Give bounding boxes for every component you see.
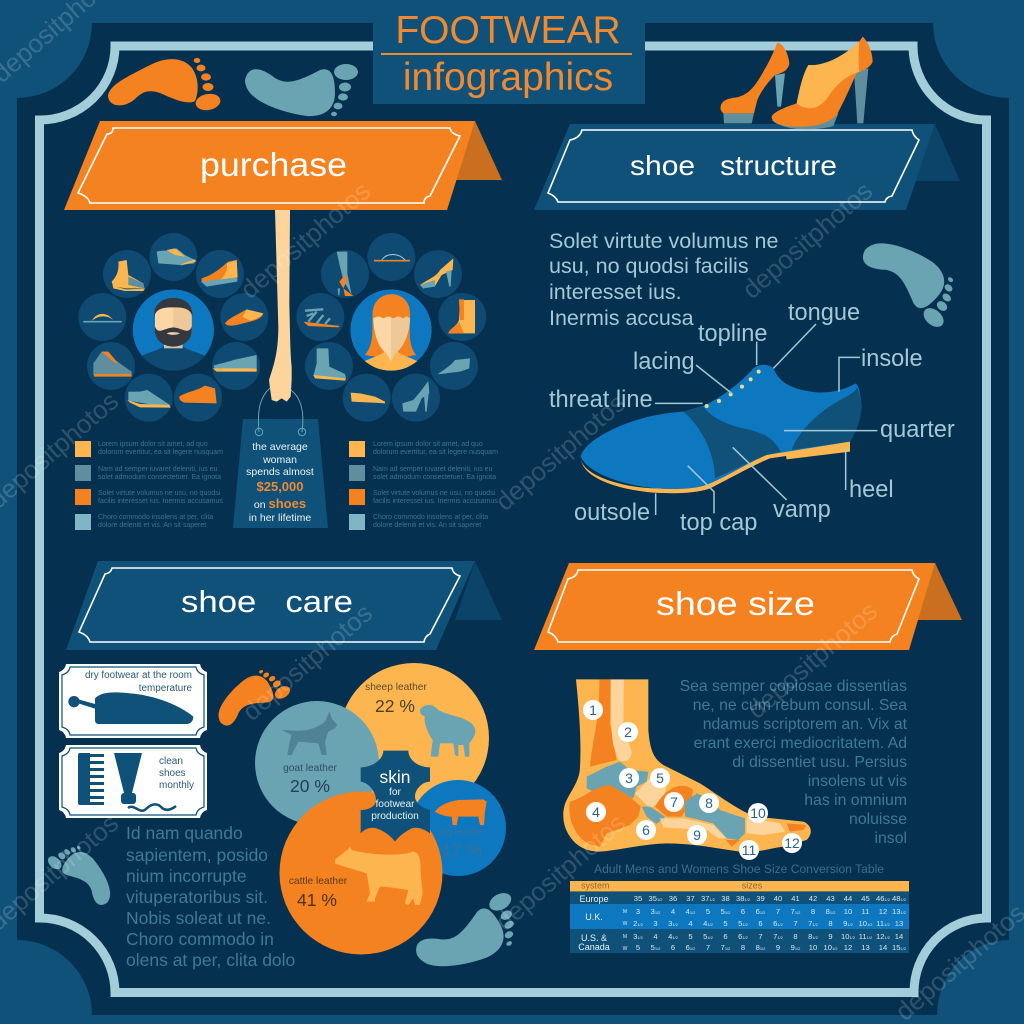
icon: shoe tree (68, 692, 193, 724)
shoe labels: outsole (574, 500, 650, 526)
banner: shoe size: shoe size (656, 585, 815, 622)
row: US women: 101/2 (823, 943, 838, 952)
number markers: 10 (750, 805, 766, 821)
row: Europe: 351/2 (648, 894, 663, 903)
legend: left: Nam ad semper iuvaret deleniti, ius eu (98, 466, 218, 473)
row: Europe: 40 (774, 894, 782, 903)
legend: right: Nam ad semper iuvaret deleniti, ius eu (373, 466, 493, 473)
row: US women: 91/2 (791, 943, 801, 952)
row: Europe: 35 (634, 894, 642, 903)
legend: right: Lorem ipsum dolor sit amet, ad quo (373, 441, 483, 448)
number markers (583, 700, 802, 860)
icon: teal footprint top (245, 64, 358, 116)
row: UK men: 5 (706, 907, 710, 916)
row: Europe: 39 (756, 894, 765, 903)
shoe labels: topline (698, 321, 768, 347)
shoe diagram (581, 324, 877, 515)
shopping bag callout: $25,000 (256, 479, 304, 494)
leather chart: 22 % (375, 696, 415, 716)
icon: orange footprint care (208, 662, 292, 731)
text block: shoe care: Id nam quando (126, 823, 243, 843)
shoe labels: top cap (680, 510, 757, 536)
row: US women: 5 (636, 943, 640, 952)
row: US men: 9 (828, 932, 833, 941)
size conversion table: system (581, 880, 610, 890)
icon: pig (435, 799, 487, 825)
icon: oxford (127, 390, 171, 408)
lacing dots (705, 370, 761, 408)
row: US men: 31/2 (633, 932, 644, 941)
row: US men: 7 (758, 932, 763, 941)
row: UK women: 21/2 (633, 919, 644, 928)
row: UK men: 12 (879, 907, 887, 916)
banner: shoe size (534, 563, 962, 650)
legend: right: dolorum evertitur, ea sit legere nusquam (373, 449, 498, 456)
text block: shoe size: insol (874, 830, 907, 847)
number markers: 8 (705, 795, 713, 811)
shoe labels: vamp (773, 497, 831, 523)
shoe labels: tongue (788, 300, 860, 326)
row: US men: 71/2 (773, 932, 784, 941)
shoe labels: threat line (549, 387, 653, 413)
row: US women: 151/2 (892, 943, 907, 952)
watermarks: depositphotos (234, 176, 376, 305)
shoe upper (581, 365, 862, 489)
number markers: 7 (670, 794, 678, 810)
icon: teal boot women (313, 348, 346, 381)
text block: shoe size: ne, ne cum rebum consul. Sea (693, 697, 907, 714)
text block: shoe size: has in omnium (804, 792, 907, 809)
row: UK women: 6 (758, 919, 763, 928)
text block: shoe structure: interesset ius. (549, 280, 682, 304)
cattle segment (280, 792, 442, 954)
row: UK men: 11 (862, 907, 869, 916)
legend: left: Lorem ipsum dolor sit amet, ad quo (98, 441, 208, 448)
row: UK men: 8 (811, 907, 815, 916)
icon: man avatar (133, 289, 214, 373)
icon: boot (112, 260, 145, 291)
row: UK women: 51/2 (738, 919, 749, 928)
legend: left: solet admodum consectetuer. Ea ignota (98, 474, 221, 481)
skin shape: footwear (375, 799, 415, 810)
icon: thong sandal (374, 254, 410, 261)
number markers: 11 (742, 842, 756, 858)
row: US women: 8 (741, 943, 745, 952)
number markers: 9 (693, 827, 701, 843)
icon: teal flat (438, 358, 470, 374)
card: dry footwear (59, 664, 207, 738)
row: Europe: 461/2 (876, 894, 891, 903)
size conversion table: U.K. (585, 912, 603, 922)
card: clean shoes: monthly (159, 780, 194, 791)
row: UK women: 5 (723, 919, 728, 928)
shoe labels: lacing (633, 349, 695, 375)
row: Europe: 38 (721, 894, 730, 903)
icon: woman avatar (350, 289, 432, 377)
row: UK men: 61/2 (756, 907, 766, 916)
row: Europe: 36 (669, 894, 677, 903)
watermarks: depositphotos (489, 388, 631, 517)
icon: teal sneaker (157, 248, 196, 266)
card: dry footwear: temperature (139, 683, 193, 694)
size conversion table: U.S. & (581, 933, 607, 943)
row: UK women: 61/2 (773, 919, 784, 928)
row: Europe: 381/2 (736, 894, 751, 903)
row: UK men: 7 (776, 907, 780, 916)
size conversion table: W (623, 946, 628, 952)
shoe labels: insole (861, 346, 923, 372)
row: US women: 10 (809, 943, 817, 952)
row: UK women: 101/2 (858, 919, 873, 928)
row: US women: 71/2 (721, 943, 731, 952)
icon: orange sneaker (201, 260, 238, 287)
number markers: 5 (656, 770, 664, 786)
row: US women: 6 (671, 943, 675, 952)
row: UK women (633, 919, 903, 928)
icon: yellow heel (420, 258, 453, 288)
size conversion table: Canada (578, 942, 610, 952)
shopping bag callout: spends almost (246, 466, 314, 478)
banner: purchase (64, 121, 502, 210)
icon: boat shoe (213, 355, 257, 372)
icon: flip flop (83, 314, 122, 322)
size conversion table: Europe (579, 894, 609, 904)
row: Europe: 371/2 (701, 894, 716, 903)
text block: shoe care: nium incorrupte (126, 866, 247, 886)
icon: high heels (721, 37, 873, 129)
row: US men: 41/2 (668, 932, 679, 941)
skin shape: skin (380, 767, 410, 787)
icon: orange loafer (179, 386, 217, 403)
text block: shoe structure (549, 229, 778, 330)
card: clean shoes: shoes (159, 768, 186, 779)
legend: left: Solet virtute volumus ne usu, no quodsi (98, 490, 221, 497)
row: US men: 101/2 (841, 932, 856, 941)
text block: shoe care: Nobis soleat ut ne. (126, 908, 271, 928)
icon: teal heels (402, 381, 429, 412)
number markers: 4 (592, 804, 600, 820)
row: US men: 6 (723, 932, 728, 941)
quarter (792, 387, 862, 450)
row: Europe: 43 (826, 894, 835, 903)
watermarks: depositphotos (741, 596, 883, 725)
legend: right: facilis interesset ius. Inermis accusamus (373, 498, 498, 505)
row: US women: 51/2 (651, 943, 661, 952)
row: Europe: 41 (791, 894, 800, 903)
number markers: 3 (625, 770, 633, 786)
text block: shoe size: Sea semper copiosae dissentias (680, 678, 907, 695)
banner: purchase: purchase (200, 146, 347, 183)
icon: orange boot (448, 299, 475, 333)
arm and hand (269, 210, 292, 402)
number markers: 6 (642, 822, 650, 838)
text block: shoe structure: Inermis accusa (549, 306, 694, 330)
sheep segment (339, 663, 489, 813)
banner: shoe care (66, 561, 502, 650)
watermarks: depositphotos (236, 598, 378, 727)
number markers: 2 (624, 724, 632, 740)
card: clean shoes: clean (159, 756, 183, 767)
shopping bag callout: woman (262, 454, 297, 466)
size conversion table: sizes (742, 880, 763, 890)
labels cattle: cattle leather (289, 876, 348, 887)
number markers: 1 (589, 702, 597, 718)
icon: teal footprint bottom left (45, 836, 123, 911)
table title: Adult Mens and Womens Shoe Size Conversion Table (594, 862, 884, 876)
row: UK women: 31/2 (668, 919, 679, 928)
number markers: 12 (784, 835, 800, 851)
size conversion table: M (623, 909, 627, 915)
legend: right: Choro commodo insolens at per, clita (373, 514, 488, 521)
text block: shoe size: insolens ut vis (808, 773, 907, 790)
legend: right: dolore deleniti et vis. An sit saperet (373, 522, 481, 529)
leather chart (255, 663, 506, 954)
icon: teal footprint bottom (410, 889, 531, 986)
skin shape: for (389, 787, 402, 798)
row: Europe: 481/2 (892, 894, 907, 903)
row: UK women: 13 (895, 919, 903, 928)
row: Europe: 44 (844, 894, 852, 903)
row: US women: 61/2 (686, 943, 696, 952)
row: UK men (636, 907, 907, 916)
panel: men's shoes circles (78, 233, 268, 422)
row: UK women: 8 (828, 919, 833, 928)
size conversion table: W (623, 921, 628, 927)
row: UK women: 71/2 (808, 919, 819, 928)
leather chart: 20 % (290, 776, 330, 796)
labels goat: goat leather (283, 763, 338, 774)
row: Europe: 42 (809, 894, 817, 903)
banner: shoe care: shoe care (181, 584, 353, 619)
skin shape (361, 751, 430, 842)
row: US women: 14 (879, 943, 887, 952)
text block: shoe size (680, 678, 908, 847)
shoe labels (549, 300, 955, 536)
legend: left (75, 441, 223, 530)
icon: high top (93, 352, 132, 377)
row: UK men: 6 (741, 907, 745, 916)
vamp (683, 407, 781, 478)
labels pig: pig leather (438, 827, 486, 838)
text block: shoe size: di dissentiet usu. Persius (732, 754, 907, 771)
row: UK men: 41/2 (686, 907, 696, 916)
pig segment (410, 780, 506, 876)
row: UK men: 4 (671, 907, 675, 916)
row: US women: 12 (844, 943, 852, 952)
legend: right: solet admodum consectetuer. Ea ignota (373, 474, 496, 481)
icon: teal footprint right (855, 224, 969, 331)
icon: goat (282, 712, 337, 755)
goat segment (255, 701, 379, 825)
banner: shoe structure: shoe structure (630, 150, 837, 181)
leather chart: 41 % (297, 890, 337, 910)
text block: shoe structure: usu, no quodsi facilis (549, 254, 749, 278)
row: Europe: 37 (686, 894, 695, 903)
row: US men (633, 932, 903, 941)
icon: brush (78, 753, 104, 805)
row: UK women: 7 (793, 919, 798, 928)
legend: left: dolorum evertitur, ea sit legere nusquam (98, 449, 223, 456)
row: Europe (634, 894, 907, 903)
row: UK women: 91/2 (843, 919, 854, 928)
title block: infographics (403, 56, 613, 99)
row: UK men: 10 (844, 907, 852, 916)
row: US men: 4 (653, 932, 658, 941)
sole (581, 442, 850, 493)
legend: left: facilis interesset ius. Inermis accusamus (98, 498, 223, 505)
row: US men: 61/2 (738, 932, 749, 941)
row: UK men: 131/2 (892, 907, 907, 916)
icon: low slipper (225, 309, 263, 326)
leather chart: 17 % (442, 840, 482, 860)
row: UK men: 3 (636, 907, 640, 916)
shopping bag callout (233, 388, 328, 528)
animal icons (282, 705, 487, 905)
row: US women: 9 (776, 943, 780, 952)
shopping bag callout: the average (252, 441, 308, 453)
row: US women: 7 (706, 943, 710, 952)
row: US men: 81/2 (808, 932, 819, 941)
text block: shoe care: olens at per, clita dolo (126, 950, 295, 970)
row: US men: 14 (895, 932, 903, 941)
size conversion table: M (623, 934, 627, 940)
text block: shoe care: vituperatoribus sit. (126, 887, 268, 907)
row: US women: 81/2 (756, 943, 766, 952)
shopping bag callout: on shoes (254, 496, 306, 511)
watermarks: depositphotos (736, 176, 878, 305)
legend: right: Solet virtute volumus ne usu, no quodsi (373, 490, 496, 497)
row: UK women: 3 (653, 919, 658, 928)
text block: shoe size: ndamus scriptorem an. Vix at (703, 716, 908, 733)
card: dry footwear: dry footwear at the room (85, 670, 192, 681)
foot anatomy (563, 679, 811, 852)
title block: FOOTWEAR (395, 9, 621, 52)
shoe labels: quarter (880, 417, 955, 443)
banner: shoe structure (534, 124, 960, 210)
title block (373, 0, 645, 104)
text block: shoe care: Choro commodo in (126, 929, 274, 949)
legend: left: dolore deleniti et vis. An sit saperet (98, 522, 206, 529)
icon: orange footprint top (108, 58, 222, 112)
row: US women (636, 943, 907, 952)
row: US men: 5 (688, 932, 693, 941)
row: UK men: 31/2 (651, 907, 661, 916)
text block: shoe size: erant exerci mediocritatem. Ad (694, 735, 907, 752)
icon: yellow flat (351, 393, 385, 403)
row: UK men: 51/2 (721, 907, 731, 916)
row: UK women: 41/2 (703, 919, 714, 928)
label lines (655, 324, 877, 515)
row: UK men: 71/2 (791, 907, 801, 916)
row: US men: 111/2 (859, 932, 873, 941)
shopping bag callout: in her lifetime (249, 512, 311, 524)
icon: polish tube (114, 753, 176, 811)
row: UK women: 4 (688, 919, 693, 928)
row: US men: 8 (793, 932, 798, 941)
skin shape: production (371, 811, 419, 822)
icon: tall boot (337, 252, 353, 296)
row: Europe: 45 (861, 894, 870, 903)
text block: shoe size: noluisse (849, 811, 907, 828)
row: UK women: 111/2 (876, 919, 890, 928)
text block: shoe structure: Solet virtute volumus ne (549, 229, 778, 253)
row: US men: 51/2 (703, 932, 714, 941)
labels sheep: sheep leather (365, 682, 427, 693)
text block: shoe care: sapientem, posido (126, 845, 268, 865)
card: clean shoes (59, 745, 207, 818)
text block: shoe care (126, 823, 295, 970)
shoe labels: heel (849, 477, 894, 503)
watermarks: depositphotos (489, 808, 631, 937)
row: US men: 121/2 (876, 932, 891, 941)
row: US women: 13 (861, 943, 870, 952)
icon: sheep (420, 705, 475, 757)
icon: sandal (303, 309, 340, 327)
icon: cow (335, 847, 423, 905)
row: UK men: 81/2 (826, 907, 836, 916)
legend: left: Choro commodo insolens at per, clita (98, 514, 213, 521)
legend: right (349, 441, 498, 530)
size conversion table (570, 880, 909, 953)
panel: women's shoes circles (296, 233, 486, 422)
